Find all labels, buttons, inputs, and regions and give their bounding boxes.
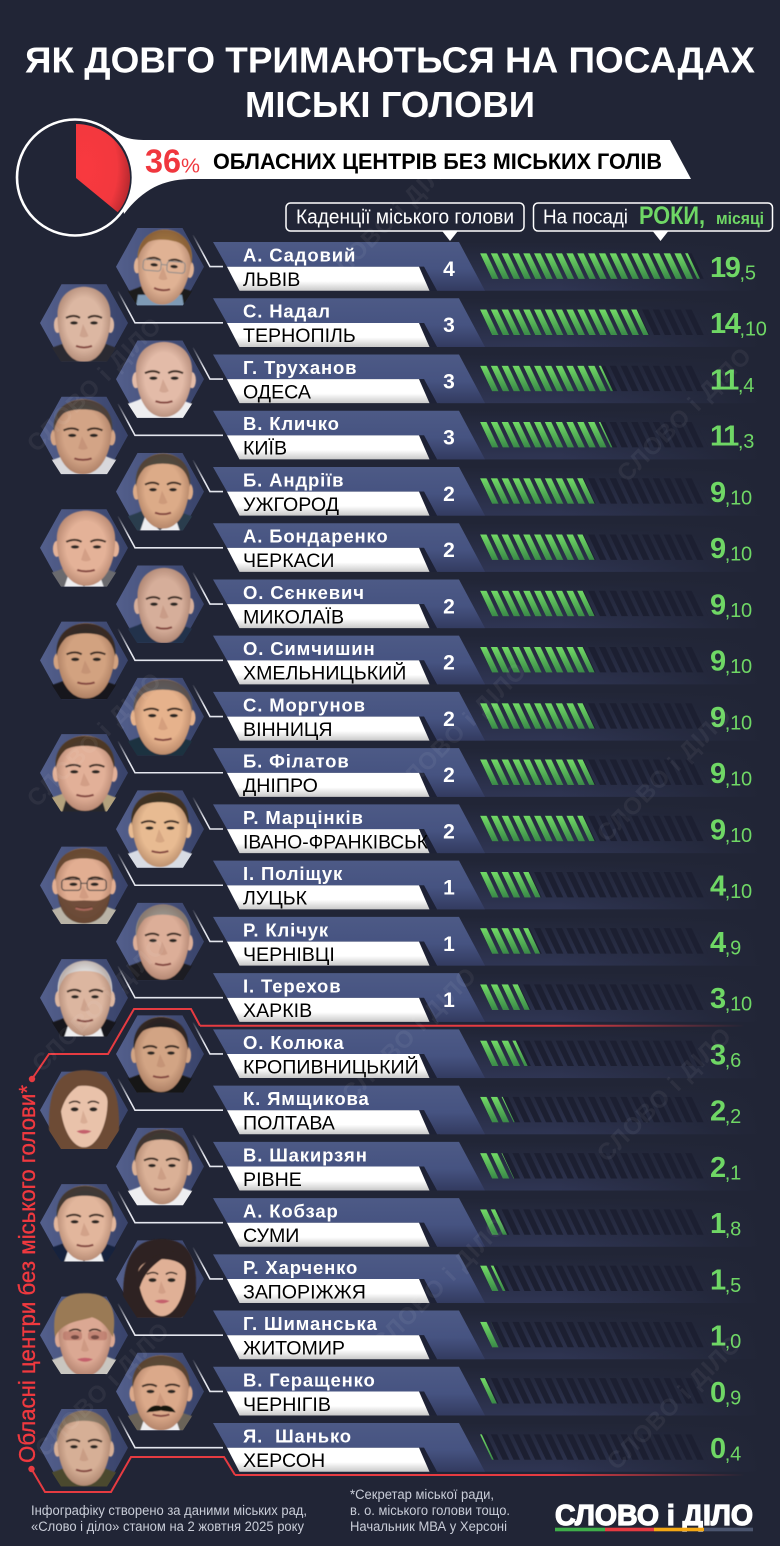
tenure value: ,10	[725, 994, 752, 1016]
name plate: Р. Марцінків	[243, 807, 364, 828]
watermarks: СЛОВО і ДІЛО	[337, 962, 483, 1108]
row 8: Симчишин	[36, 622, 761, 700]
callout figure: 36	[145, 142, 181, 180]
name plate: І. Поліщук	[243, 863, 343, 884]
name plate	[213, 1423, 761, 1472]
tenure value: ,10	[725, 544, 752, 566]
row 14: Терехов	[36, 959, 761, 1038]
tenure value: 11	[710, 421, 738, 453]
pie chart: 36%	[17, 120, 133, 236]
column header: tenure: РОКИ,	[639, 202, 705, 230]
name plate: А. Кобзар	[243, 1201, 339, 1222]
terms: 2	[443, 764, 455, 787]
name plate: СУМИ	[243, 1225, 299, 1247]
name plate: ВІННИЦЯ	[243, 719, 333, 741]
name plate: ЗАПОРІЖЖЯ	[243, 1281, 366, 1303]
tenure value: 4	[710, 927, 725, 959]
tenure value: ,5	[725, 1275, 741, 1297]
terms: 2	[443, 708, 455, 731]
name plate: ІВАНО-ФРАНКІВСЬК	[243, 831, 429, 853]
title: ЯК ДОВГО ТРИМАЮТЬСЯ НА ПОСАДАХ	[25, 39, 756, 80]
terms: 1	[443, 877, 455, 900]
name plate	[213, 861, 761, 910]
tenure value: 3	[710, 1039, 725, 1071]
terms: 3	[443, 370, 455, 393]
terms: 2	[443, 820, 455, 843]
name plate: О. Симчишин	[243, 638, 376, 659]
name plate	[213, 523, 761, 572]
name plate: О. Колюка	[243, 1032, 345, 1053]
name plate	[213, 1254, 761, 1303]
portrait: Шакирзян	[112, 1128, 208, 1207]
row 22: Шанько	[36, 1409, 761, 1488]
name plate: Р. Харченко	[243, 1257, 358, 1278]
tenure value: ,4	[738, 375, 754, 397]
tenure value: 11	[710, 364, 738, 396]
row 18: Кобзар	[36, 1184, 761, 1263]
tenure bar	[480, 1434, 708, 1460]
watermarks: СЛОВО і ДІЛО	[387, 657, 533, 803]
terms: 2	[443, 539, 455, 562]
row 15: Колюка	[112, 1015, 761, 1094]
row 4: Кличко	[36, 397, 761, 475]
name plate: РІВНЕ	[243, 1169, 302, 1191]
portrait: Шанько	[36, 1409, 132, 1488]
tenure value: ,9	[725, 937, 741, 959]
row 13: Клічук	[112, 903, 761, 982]
name plate: ХАРКІВ	[243, 1000, 312, 1022]
terms: 2	[443, 652, 455, 675]
name plate: ЧЕРКАСИ	[243, 550, 334, 572]
portrait: Геращенко	[112, 1353, 208, 1432]
portrait: Кличко	[36, 397, 132, 475]
name plate	[213, 242, 761, 291]
portrait: Надал	[36, 284, 132, 363]
name plate	[213, 804, 761, 853]
portrait: Моргунов	[112, 678, 208, 757]
tenure value: ,8	[725, 1219, 741, 1241]
name plate	[213, 298, 761, 347]
tenure value: ,1	[725, 1162, 741, 1184]
name plate: В. Шакирзян	[243, 1144, 368, 1165]
tenure value: ,4	[725, 1444, 741, 1466]
tenure value: ,2	[725, 1106, 741, 1128]
row 16: Ямщикова	[40, 1070, 761, 1150]
name plate: ХЕРСОН	[243, 1450, 325, 1472]
terms: 1	[443, 989, 455, 1012]
terms: 1	[443, 933, 455, 956]
portrait: Садовий	[116, 228, 204, 306]
red bracket: regional centres without mayors	[28, 1009, 750, 1492]
portrait: Сєнкевич	[112, 565, 208, 644]
tenure value: 0	[710, 1377, 725, 1409]
name plate: ХМЕЛЬНИЦЬКИЙ	[243, 661, 406, 685]
row 17: Шакирзян	[112, 1128, 761, 1207]
watermarks: СЛОВО і ДІЛО	[367, 1212, 513, 1358]
row 1: Садовий	[112, 227, 761, 307]
tenure value: 9	[710, 589, 725, 621]
row 11: Марцінків	[112, 790, 761, 869]
row 3: Труханов	[112, 340, 761, 419]
tenure value: ,10	[725, 656, 752, 678]
footnote: в. о. міського голови тощо.	[350, 1503, 510, 1518]
tenure value: ,10	[725, 712, 752, 734]
tenure bar	[480, 984, 708, 1010]
tenure value: ,10	[725, 825, 752, 847]
column header: tenure: На посаді	[543, 206, 628, 228]
name plate: В. Геращенко	[243, 1369, 376, 1390]
name plate: ОДЕСА	[243, 381, 312, 403]
watermarks: СЛОВО і ДІЛО	[612, 342, 758, 488]
tenure value: ,0	[725, 1331, 741, 1353]
watermarks: СЛОВО і ДІЛО	[602, 1330, 748, 1476]
name plate: ЖИТОМИР	[243, 1338, 345, 1360]
portrait: Терехов	[36, 959, 132, 1038]
name plate	[213, 467, 761, 516]
name plate: Б. Андріїв	[243, 469, 344, 490]
tenure value: ,5	[739, 262, 756, 284]
tenure bar	[480, 647, 708, 672]
tenure bar	[480, 534, 708, 560]
tenure value: 9	[710, 702, 725, 734]
portrait: Клічук	[112, 903, 208, 982]
source note: «Слово і діло» станом на 2 жовтня 2025 року	[31, 1519, 304, 1534]
column header: tenure	[534, 202, 772, 241]
name plate	[213, 579, 761, 628]
watermarks: СЛОВО і ДІЛО	[22, 667, 168, 813]
source note	[31, 1503, 307, 1534]
name plate: С. Моргунов	[243, 694, 366, 715]
tenure value: 2	[710, 1096, 725, 1128]
title: МІСЬКІ ГОЛОВИ	[245, 84, 535, 125]
name plate	[213, 917, 761, 966]
white banner	[108, 128, 691, 214]
terms: 3	[443, 314, 455, 337]
row 5: Андріїв	[112, 453, 761, 532]
name plate: УЖГОРОД	[243, 494, 339, 516]
column header: terms	[286, 203, 524, 241]
logo: СЛОВО і ДІЛО	[555, 1500, 753, 1532]
watermarks: СЛОВО і ДІЛО	[30, 1317, 176, 1463]
tenure value: 0	[710, 1433, 725, 1465]
tenure bar	[480, 703, 708, 729]
row 19: Харченко	[116, 1239, 761, 1319]
name plate	[213, 1086, 761, 1135]
name plate	[213, 411, 761, 460]
portrait: Шиманська	[36, 1293, 132, 1376]
callout: 36% of regional centres without mayors	[17, 120, 691, 236]
watermarks: СЛОВО і ДІЛО	[592, 1022, 738, 1168]
tenure value: ,6	[725, 1050, 741, 1072]
portrait: Поліщук	[36, 847, 132, 925]
tenure value: 1	[710, 1208, 725, 1240]
name plate	[213, 1142, 761, 1191]
name plate: А. Бондаренко	[243, 526, 389, 547]
row 21: Геращенко	[112, 1353, 761, 1432]
tenure value: ,9	[725, 1387, 741, 1409]
name plate: А. Садовий	[243, 244, 356, 266]
name plate: Б. Філатов	[243, 751, 350, 772]
tenure bar	[480, 1266, 708, 1291]
column header: terms: Каденції міського голови	[296, 206, 514, 228]
name plate: Г. Труханов	[243, 357, 357, 378]
tenure bar	[480, 872, 708, 897]
tenure bar	[480, 816, 708, 841]
name plate: О. Сєнкевич	[243, 582, 365, 603]
tenure value: 9	[710, 758, 725, 790]
row 9: Моргунов	[112, 678, 761, 757]
portrait: Марцінків	[112, 790, 208, 869]
source note: Інфографіку створено за даними міських рад,	[31, 1503, 307, 1518]
tenure value: 3	[710, 983, 725, 1015]
tenure bar	[480, 1041, 708, 1066]
footnote: Начальник МВА у Херсоні	[350, 1519, 507, 1534]
footnote: *Секретар міської ради,	[350, 1487, 494, 1502]
tenure bar	[480, 478, 708, 504]
row 20: Шиманська	[36, 1293, 761, 1376]
portrait: Колюка	[112, 1015, 208, 1094]
name plate: С. Надал	[243, 301, 331, 322]
tenure value: 9	[710, 477, 725, 509]
portrait: Бондаренко	[36, 509, 132, 588]
name plate: Р. Клічук	[243, 919, 329, 940]
tenure bar	[480, 253, 708, 279]
tenure bar	[480, 591, 708, 616]
portrait: Харченко	[116, 1239, 204, 1319]
portrait: Філатов	[36, 734, 132, 813]
title	[25, 39, 756, 125]
tenure bar	[480, 1322, 708, 1347]
name plate: В. Кличко	[243, 413, 340, 434]
portrait: Труханов	[112, 340, 208, 419]
vertical label: Обласні центри без міського голови*	[14, 1085, 40, 1463]
terms: 3	[443, 427, 455, 450]
callout text: ОБЛАСНИХ ЦЕНТРІВ БЕЗ МІСЬКИХ ГОЛІВ	[213, 149, 662, 174]
name plate	[213, 636, 761, 685]
watermarks: СЛОВО і ДІЛО	[27, 932, 173, 1078]
terms: 2	[443, 483, 455, 506]
tenure value: 1	[710, 1321, 725, 1353]
tenure bar	[480, 928, 708, 954]
name plate: ТЕРНОПІЛЬ	[243, 325, 356, 347]
tenure value: 2	[710, 1152, 725, 1184]
name plate: МИКОЛАЇВ	[243, 606, 344, 628]
name plate	[213, 973, 761, 1022]
name plate	[213, 1029, 761, 1078]
tenure value: 1	[710, 1264, 725, 1296]
name plate	[213, 1367, 761, 1416]
tenure bar	[480, 1097, 708, 1122]
tenure bar	[480, 310, 708, 335]
portrait: Ямщикова	[40, 1070, 128, 1150]
name plate: ДНІПРО	[243, 775, 318, 797]
row 7: Сєнкевич	[112, 565, 761, 644]
name plate: КИЇВ	[243, 438, 287, 460]
tenure value: ,10	[725, 769, 752, 791]
portrait: Симчишин	[36, 622, 132, 700]
tenure value: 19	[710, 252, 739, 284]
name plate: ПОЛТАВА	[243, 1113, 336, 1135]
terms: 2	[443, 595, 455, 618]
tenure value: ,10	[739, 319, 767, 341]
terms: 4	[443, 258, 455, 281]
name plate: Я. Шанько	[243, 1426, 352, 1447]
name plate	[213, 692, 761, 741]
tenure bar	[480, 1378, 708, 1404]
tenure bar	[480, 422, 708, 447]
name plate	[213, 748, 761, 797]
portrait: Кобзар	[36, 1184, 132, 1263]
name plate: ЛУЦЬК	[243, 888, 308, 910]
tenure bar	[480, 759, 708, 785]
name plate	[213, 1311, 761, 1360]
tenure value: ,10	[725, 487, 752, 509]
tenure value: ,10	[725, 881, 752, 903]
tenure value: ,3	[738, 431, 754, 453]
name plate: К. Ямщикова	[243, 1088, 370, 1109]
name plate: ЛЬВІВ	[243, 269, 300, 291]
name plate: Г. Шиманська	[243, 1313, 378, 1334]
tenure value: 14	[710, 308, 739, 340]
row 12: Поліщук	[36, 847, 761, 925]
tenure bar	[480, 366, 708, 391]
name plate: ЧЕРНІГІВ	[243, 1394, 331, 1416]
footnote	[350, 1487, 510, 1534]
watermarks: СЛОВО і ДІЛО	[592, 702, 738, 848]
tenure bar	[480, 1153, 708, 1179]
tenure value: 4	[710, 871, 725, 903]
name plate: І. Терехов	[243, 976, 341, 997]
percent sign: %	[181, 156, 200, 178]
watermarks: СЛОВО і ДІЛО	[317, 147, 463, 293]
tenure value: 9	[710, 814, 725, 846]
row 10: Філатов	[36, 734, 761, 813]
row 2: Надал	[36, 284, 767, 363]
name plate	[213, 1198, 761, 1247]
portrait: Андріїв	[112, 453, 208, 532]
tenure value: 9	[710, 533, 725, 565]
name plate: КРОПИВНИЦЬКИЙ	[243, 1054, 419, 1078]
name plate: ЧЕРНІВЦІ	[243, 944, 335, 966]
tenure bar	[480, 1209, 708, 1235]
tenure value: 9	[710, 646, 725, 678]
column header: tenure: місяці	[716, 209, 764, 228]
watermarks: СЛОВО і ДІЛО	[22, 312, 168, 458]
tenure value: ,10	[725, 600, 752, 622]
row 6: Бондаренко	[36, 509, 761, 588]
name plate	[213, 354, 761, 403]
